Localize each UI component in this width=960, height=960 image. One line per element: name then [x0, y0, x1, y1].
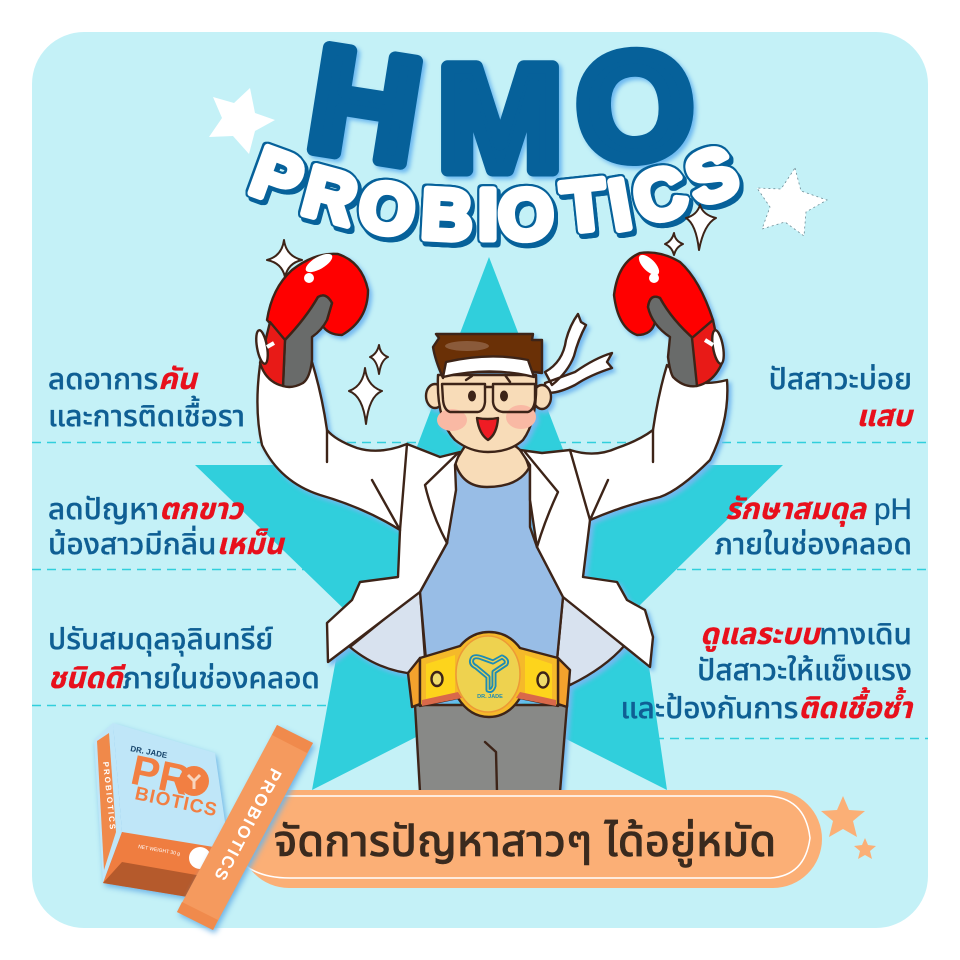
title: PROBIOTICS: S [676, 131, 748, 222]
title: PROBIOTICS: C [625, 151, 695, 240]
title: PROBIOTICS: T [558, 165, 610, 248]
title: HMO: M [438, 34, 562, 202]
belt logo [472, 657, 506, 690]
title: PROBIOTICS: P [241, 132, 313, 223]
orange stars [821, 796, 876, 859]
product box [94, 723, 232, 897]
product box: DR. JADE [130, 744, 169, 760]
championship belt [408, 632, 570, 717]
right benefit 3: ดูแลระบบทางเดิน [700, 618, 912, 651]
title: PROBIOTICS: B [419, 175, 475, 256]
left jacket and sleeve [257, 362, 460, 662]
title: PROBIOTICS: R [295, 152, 365, 241]
title: PROBIOTICS [241, 131, 748, 256]
title: PROBIOTICS: O [354, 167, 420, 252]
face [438, 375, 536, 452]
championship belt: DR. JADE [477, 694, 503, 700]
title: PROBIOTICS: I [478, 176, 498, 255]
right benefit 1: แสบ [856, 400, 914, 433]
right jacket and sleeve [520, 365, 727, 667]
title: PROBIOTICS: O [496, 175, 556, 256]
glasses [442, 375, 535, 412]
left glove [254, 250, 368, 387]
trousers [415, 705, 567, 792]
left benefit 1: และการติดเชื้อรา [48, 395, 245, 433]
left benefit 3: ปรับสมดุลจุลินทรีย์ [48, 623, 273, 656]
product sachet: PROBIOTICS [209, 765, 285, 885]
left benefit 2: ลดปัญหาตกขาว [48, 493, 243, 526]
product box: NET WEIGHT 30 g [138, 844, 181, 857]
headband [443, 356, 534, 377]
right benefit 2: ภายในช่องคลอด [715, 528, 912, 561]
headband tails [545, 314, 612, 393]
jacket lining [350, 590, 625, 685]
left benefit 2: เหม็น [217, 528, 285, 561]
hair [433, 334, 542, 378]
title: PROBIOTICS: I [604, 165, 637, 246]
slogan banner [240, 790, 822, 888]
right benefit 3: และป้องกันการ [620, 692, 798, 725]
right benefit 3: ติดเชื้อซ้ำ [798, 687, 914, 725]
white star right [757, 168, 827, 236]
right benefit 1: ปัสสาวะบ่อย [769, 363, 912, 396]
left benefit 3: ภายในช่องคลอด [123, 662, 320, 695]
sparkles [267, 205, 716, 424]
product box: PR [127, 746, 194, 804]
slogan banner: จัดการปัญหาสาวๆ ได้อยู่หมัด [274, 818, 776, 867]
product box: BIOTICS [133, 783, 220, 821]
cheeks [437, 409, 467, 431]
right benefit 3: ปัสสาวะให้แข็งแรง [697, 654, 912, 687]
product sachet [177, 725, 313, 930]
title: HMO: H [298, 14, 432, 196]
ears [426, 384, 444, 408]
title: HMO: O [571, 18, 699, 194]
left benefit 3: ชนิดดี [48, 662, 126, 695]
title: HMO [298, 14, 699, 202]
eyes [468, 390, 476, 402]
left benefit 2: น้องสาวมีกลิ่น [48, 525, 217, 561]
left benefit 1: ลดอาการคัน [48, 363, 197, 396]
shirt [420, 460, 563, 660]
right benefit 2: รักษาสมดุล pH [725, 493, 912, 526]
white star left [209, 88, 275, 154]
neck [455, 446, 529, 487]
product box: PROBIOTICS [101, 761, 117, 832]
mouth [477, 418, 498, 440]
large teal star [195, 257, 783, 790]
jacket lapels and fold lines [327, 430, 653, 547]
boxer character [254, 250, 727, 792]
right glove [614, 252, 726, 386]
